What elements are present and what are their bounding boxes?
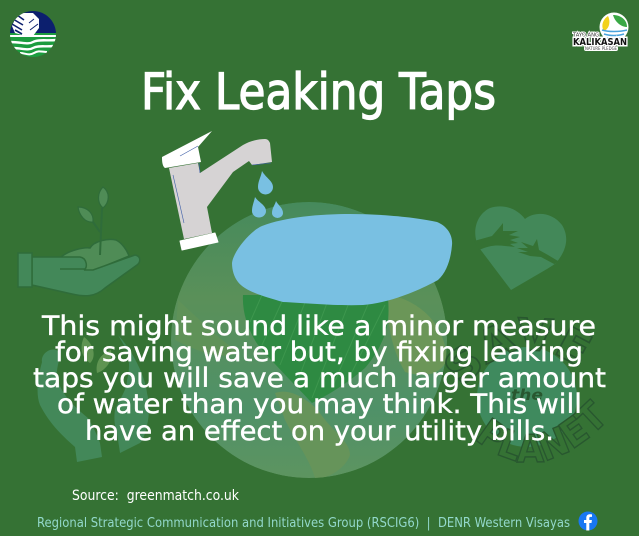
logo: Tayo ang Kalikasan: KALIKASAN <box>573 37 627 48</box>
source line: Source: greenmatch.co.uk <box>72 488 240 504</box>
icon: leaking faucet <box>162 131 283 250</box>
footer credit: Regional Strategic Communication and Initiatives Group (RSCIG6) | DENR Western Visayas <box>37 516 570 531</box>
icon: save the planet lettering: the <box>511 386 543 404</box>
icon: facebook <box>578 512 598 530</box>
body text: taps you will save a much larger amount <box>33 363 606 394</box>
illustration: faded earth globe <box>171 202 447 478</box>
icon: hand holding seedling <box>18 187 140 296</box>
logo: Tayo ang Kalikasan: NATURE PLEDGE <box>585 46 617 51</box>
icon: cupped hands with leaves <box>38 335 149 462</box>
water puddle <box>232 214 452 305</box>
body text <box>33 311 606 447</box>
logo: DENR seal <box>10 11 56 57</box>
title: Fix Leaking Taps <box>141 63 496 121</box>
icon: heart with hands <box>474 206 566 290</box>
icon: water drops <box>252 171 283 218</box>
logo: Tayo ang Kalikasan <box>572 12 628 51</box>
body text: for saving water but, by fixing leaking <box>55 337 583 368</box>
body text: have an effect on your utility bills. <box>85 416 554 447</box>
body text: This might sound like a minor measure <box>41 311 596 342</box>
icon: save the planet lettering: PLANET <box>476 398 604 463</box>
body text: of water than you may think. This will <box>57 389 582 420</box>
icon: save the planet lettering: SAVE <box>445 316 593 384</box>
icon: save the planet lettering <box>445 316 604 463</box>
logo: Tayo ang Kalikasan: TAYO ANG <box>572 32 599 38</box>
